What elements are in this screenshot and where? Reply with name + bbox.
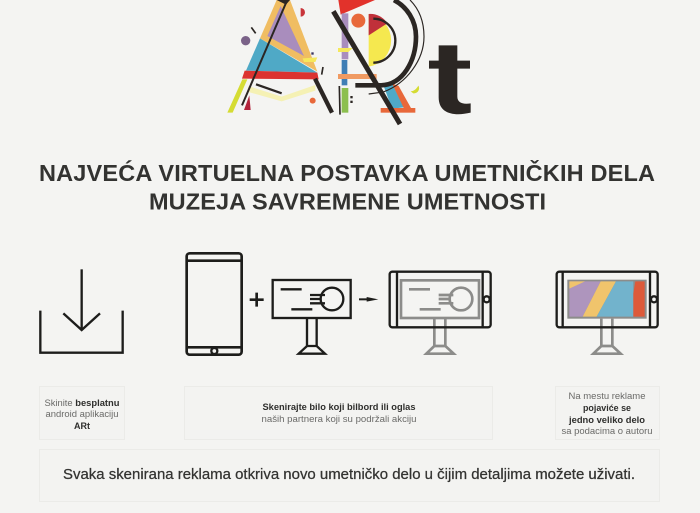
title	[39, 159, 655, 214]
grey stand	[593, 319, 621, 354]
tablet outline	[390, 272, 491, 327]
panel: download caption: Skinite besplatnu	[44, 398, 120, 408]
letter t	[429, 45, 471, 114]
icon: artwork on tablet	[557, 272, 658, 354]
panel: result caption: pojaviće se	[583, 403, 631, 413]
arrow	[359, 297, 378, 302]
title: NAJVEĆA VIRTUELNA POSTAVKA UMETNIČKIH DELA	[39, 159, 655, 186]
panel: summary: Svaka skenirana reklama otkriva novo umetničko delo u čijim detaljima možete uživati.	[63, 467, 635, 483]
panel: scan caption: Skenirajte bilo koji bilbord ili oglas	[262, 402, 416, 412]
icon: plus	[250, 293, 264, 307]
panel: download caption	[40, 386, 124, 440]
panel: scan caption: naših partnera koji su podržali akciju	[262, 414, 416, 424]
logo: ARt	[227, 0, 471, 124]
letter A	[227, 0, 332, 113]
panel: download caption: android aplikaciju	[46, 409, 118, 419]
letter R	[333, 0, 424, 124]
panel: result caption: jedno veliko delo	[568, 415, 646, 425]
tablet outline	[557, 272, 658, 327]
icon: scanned billboard on tablet	[390, 272, 491, 354]
title: MUZEJA SAVREMENE UMETNOSTI	[149, 188, 546, 214]
panel: download caption: ARt	[74, 421, 90, 431]
panel: result caption: sa podacima o autoru	[562, 426, 652, 436]
panel: scan caption	[184, 386, 492, 440]
icon: billboard	[273, 280, 351, 354]
panel: summary	[40, 450, 660, 502]
icon: download	[40, 269, 123, 353]
panel: result caption	[556, 386, 660, 440]
icon: phone	[187, 253, 242, 355]
panel: result caption: Na mestu reklame	[568, 391, 646, 401]
artwork	[567, 280, 647, 319]
grey billboard	[401, 280, 479, 354]
